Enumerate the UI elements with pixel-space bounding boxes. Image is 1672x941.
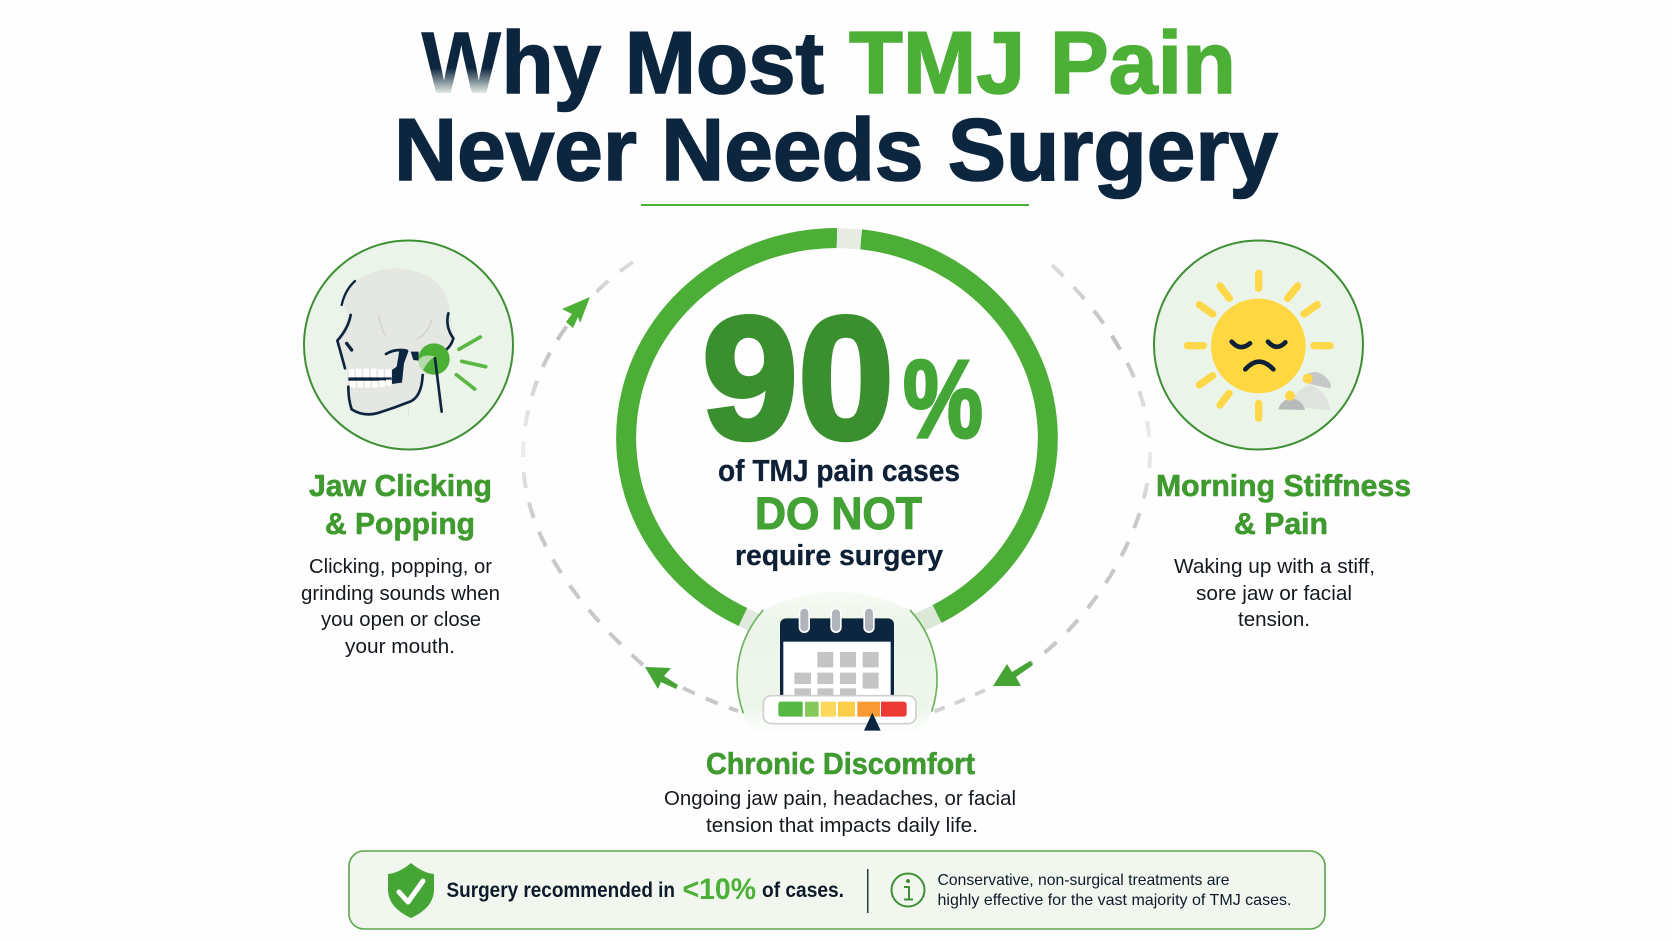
text: surgery recommended: Surgery recommended in — [446, 879, 675, 902]
text: surgery recommended — [446, 873, 844, 906]
panel: surgery callout — [349, 851, 1325, 929]
icon: sad sun — [1154, 240, 1363, 450]
title: TMJ Pain — [849, 13, 1236, 112]
text: morning stiffness: Waking up with a stiff, — [1174, 555, 1375, 578]
text: morning stiffness: & Pain — [1234, 506, 1328, 541]
progress ring — [626, 238, 1048, 626]
center stat — [702, 280, 983, 572]
text: jaw clicking: Jaw Clicking — [309, 468, 492, 503]
text: chronic discomfort: Ongoing jaw pain, headaches, or facial — [664, 787, 1016, 810]
text: conservative treatments — [938, 872, 1292, 909]
text: chronic discomfort: tension that impacts daily life. — [706, 814, 978, 837]
dashed cycle arcs — [523, 262, 1150, 713]
text: morning stiffness: tension. — [1238, 608, 1310, 631]
center stat: % — [903, 338, 983, 461]
title — [394, 13, 1278, 199]
text: morning stiffness — [1156, 468, 1411, 631]
text: morning stiffness: sore jaw or facial — [1196, 582, 1352, 605]
text: chronic discomfort: Chronic Discomfort — [706, 746, 975, 781]
center stat: of TMJ pain cases — [718, 453, 960, 488]
center stat: require surgery — [735, 540, 943, 572]
text: jaw clicking: you open or close — [321, 608, 481, 631]
center stat: 90 — [702, 280, 894, 475]
text: jaw clicking: & Popping — [325, 506, 475, 541]
icon: shield check — [388, 863, 434, 918]
icon: skull with clicking jaw — [304, 240, 513, 450]
text: conservative treatments: Conservative, non-surgical treatments are — [938, 872, 1230, 889]
arrow: lower right — [993, 661, 1033, 686]
title: Never Needs Surgery — [394, 100, 1278, 199]
title: Why Most — [421, 13, 824, 112]
center stat: DO NOT — [755, 488, 922, 539]
text: jaw clicking — [301, 468, 500, 658]
text: chronic discomfort — [664, 746, 1016, 837]
arrow: lower left — [645, 667, 678, 689]
text: jaw clicking: your mouth. — [345, 635, 455, 658]
arrow: top left — [562, 297, 590, 328]
icon: calendar with pain scale — [737, 592, 937, 735]
icon: info — [892, 874, 924, 906]
text: surgery recommended: of cases. — [762, 879, 844, 902]
text: jaw clicking: grinding sounds when — [301, 582, 500, 605]
text: surgery recommended: <10% — [682, 873, 756, 906]
text: conservative treatments: highly effective for the vast majority of TMJ cases. — [938, 892, 1292, 909]
text: jaw clicking: Clicking, popping, or — [309, 555, 492, 578]
text: morning stiffness: Morning Stiffness — [1156, 468, 1411, 503]
